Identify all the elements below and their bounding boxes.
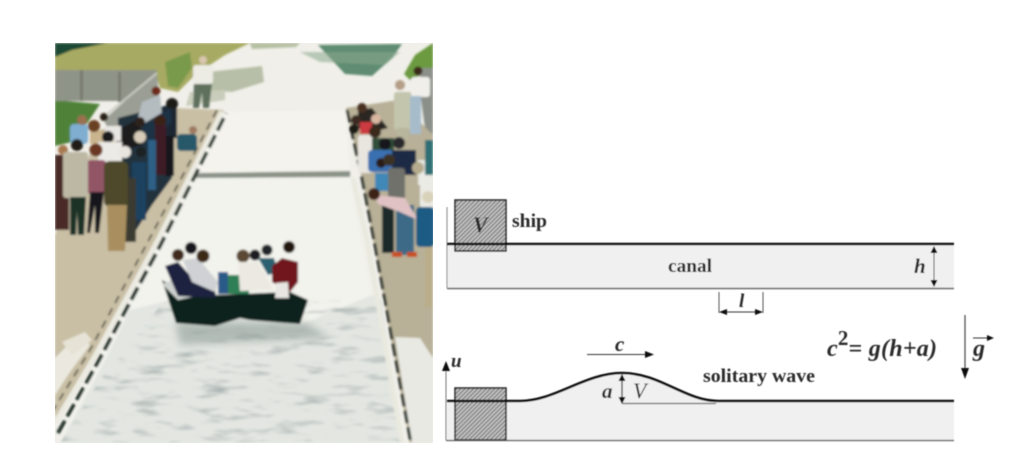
- standing man far: [193, 56, 213, 108]
- ship box displaced: [455, 388, 506, 440]
- seated spectator: [177, 126, 197, 151]
- right crowd standing pair: [394, 66, 430, 140]
- lock sill: [193, 171, 350, 178]
- right deck: [346, 100, 433, 443]
- left crowd: [55, 86, 178, 251]
- label: ship: ship: [512, 211, 547, 232]
- formula: =: [849, 336, 862, 362]
- panel: lower diagram, solitary wave: [442, 315, 994, 440]
- label: depth h: [914, 246, 938, 287]
- formula: 2: [838, 326, 848, 350]
- left deck: [55, 108, 224, 420]
- right wall rail: [347, 110, 411, 443]
- fence: [55, 68, 433, 135]
- boat with passengers: [162, 241, 308, 326]
- photo: crowd watching a boat in the canal: [52, 43, 434, 443]
- wave speed c: [587, 332, 654, 358]
- gravity arrow: g: [972, 336, 985, 362]
- formula: g(h+a): [869, 336, 937, 362]
- right crowd: [349, 103, 434, 307]
- diagram: canal schematic: [442, 200, 994, 440]
- lower water surface: [60, 176, 348, 434]
- axis u: [442, 351, 462, 440]
- label: length l: [719, 291, 763, 315]
- amplitude a: [602, 374, 626, 404]
- ship box: V: [473, 212, 490, 237]
- ship box: [455, 200, 506, 251]
- amplitude a: a: [602, 379, 612, 403]
- formula: c: [827, 336, 838, 362]
- axis u: u: [451, 351, 462, 372]
- label: depth h: h: [914, 254, 926, 278]
- label: length l: l: [739, 291, 745, 312]
- label: canal: canal: [668, 256, 712, 277]
- far bank vegetation: [55, 43, 433, 146]
- left wall rail: [52, 110, 226, 433]
- gravity arrow: [961, 315, 994, 379]
- water surface with wave crest: [447, 373, 954, 401]
- label: solitary wave: solitary wave: [703, 366, 815, 387]
- wave water body: [447, 373, 954, 440]
- upper water surface with reflections: [186, 43, 402, 106]
- canal water: [447, 245, 954, 288]
- volume V: V: [633, 378, 649, 403]
- wave speed c: c: [615, 332, 625, 356]
- foam wake: [55, 295, 405, 443]
- panel: upper diagram, ship at rest: [447, 200, 954, 315]
